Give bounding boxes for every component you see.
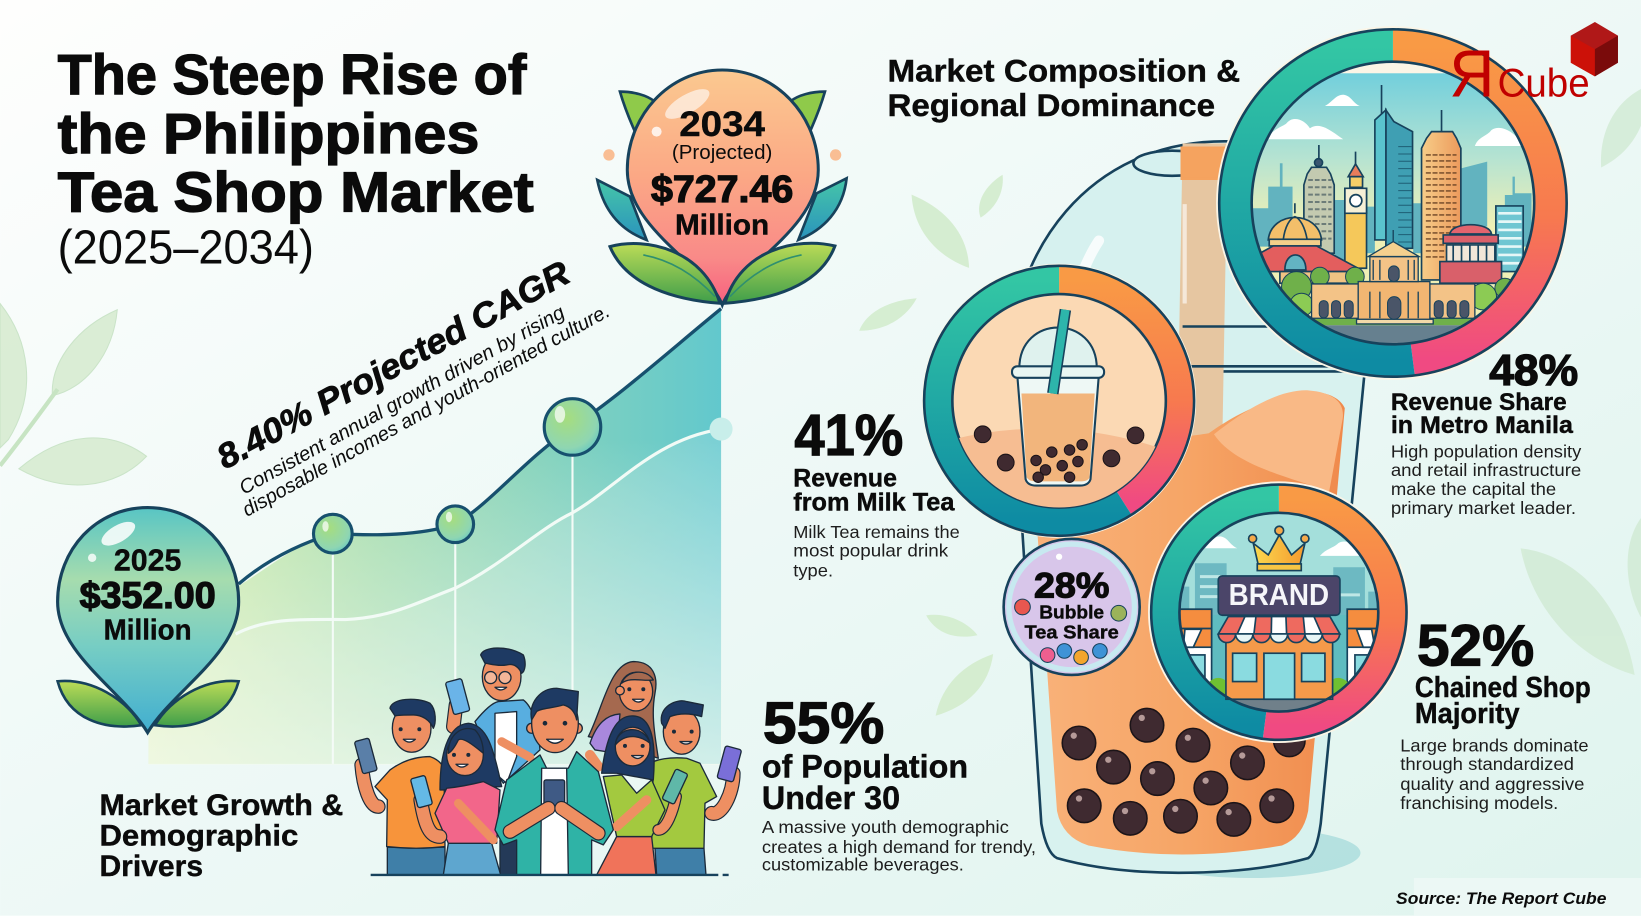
- chart nodes: [313, 399, 601, 553]
- city scene: [1243, 73, 1543, 353]
- 2025 bubble: [58, 508, 239, 733]
- heading: market composition: Regional Dominance: [887, 88, 1215, 123]
- title: [58, 43, 534, 275]
- stat: 48% metro manila: make the capital the: [1391, 479, 1556, 499]
- title: Tea Shop Market: [58, 160, 534, 223]
- stat: 55% population: 55%: [763, 691, 884, 756]
- stat: 52% chained shops: franchising models.: [1400, 793, 1558, 813]
- heading: market composition: Market Composition &: [887, 54, 1240, 89]
- tapioca pearls: [1062, 708, 1305, 836]
- stat: 48% metro manila: in Metro Manila: [1391, 412, 1574, 439]
- 2034 bubble: [597, 70, 847, 305]
- heading: market growth: Demographic: [99, 820, 298, 853]
- bubble: 28% bubble tea share: [1004, 539, 1140, 675]
- 2034 bubble: Million: [675, 208, 769, 240]
- stat: 55% population: [762, 691, 1036, 875]
- logo: RCube: [1449, 22, 1618, 111]
- source note: [1396, 878, 1641, 916]
- ring: metro manila skyline: [1216, 26, 1570, 380]
- bubble: 28% bubble tea share: Bubble: [1039, 601, 1104, 622]
- stat: 52% chained shops: Large brands dominate: [1400, 735, 1589, 755]
- stat: 41% milk tea: [793, 403, 960, 581]
- title: The Steep Rise of: [58, 43, 527, 106]
- stat: 52% chained shops: through standardized: [1400, 754, 1574, 774]
- stat: 41% milk tea: most popular drink: [793, 541, 948, 561]
- stat: 48% metro manila: High population density: [1391, 441, 1581, 461]
- 2034 bubble: 2034: [679, 104, 765, 144]
- 2025 bubble: 2025: [114, 544, 181, 577]
- stat: 48% metro manila: primary market leader.: [1391, 498, 1576, 518]
- source note: Source: The Report Cube: [1396, 889, 1606, 908]
- decorative tea leaves: left: [0, 303, 147, 485]
- illustration: youth group with phones: [354, 648, 742, 875]
- title: the Philippines: [58, 102, 479, 165]
- person: orange shirt man: [354, 699, 445, 875]
- stat: 41% milk tea: Revenue: [793, 465, 897, 493]
- stat: 52% chained shops: Chained Shop: [1415, 671, 1591, 703]
- stat: 48% metro manila: and retail infrastructure: [1391, 460, 1581, 480]
- 2025 bubble: Million: [104, 613, 192, 645]
- shop storefront: [1218, 526, 1340, 699]
- ring: chained shop brand: [1148, 481, 1410, 743]
- 2025 bubble: $352.00: [80, 575, 216, 616]
- heading: market composition: [887, 54, 1240, 123]
- stat: 52% chained shops: Majority: [1415, 697, 1520, 729]
- heading: market growth: [99, 789, 343, 883]
- person: coral pants girl: [597, 716, 688, 875]
- shop scene: [1180, 514, 1377, 710]
- milk tea cup icon: [959, 308, 1156, 508]
- person: centre man in teal jacket: [495, 688, 613, 875]
- stat: 55% population: customizable beverages.: [762, 855, 964, 875]
- person: woman at back right: [588, 662, 658, 767]
- CAGR callout: Consistent annual growth driven by rising: [236, 302, 568, 499]
- stat: 48% metro manila: 48%: [1489, 346, 1578, 395]
- heading: market growth: Drivers: [99, 850, 203, 883]
- stat: 52% chained shops: 52%: [1417, 614, 1534, 679]
- stat: 55% population: of Population: [762, 749, 968, 785]
- stat: 48% metro manila: [1391, 346, 1581, 518]
- decorative tea leaves: middle: [859, 175, 1003, 716]
- person: glasses man at back: [445, 648, 540, 783]
- decorative tea leaves: right: [1521, 89, 1641, 675]
- bubble: 28% bubble tea share: 28%: [1034, 566, 1109, 606]
- logo: RCube: Я: [1449, 36, 1494, 111]
- heading: market growth: Market Growth &: [99, 789, 343, 822]
- title: (2025–2034): [58, 221, 314, 275]
- CAGR callout: 8.40% Projected CAGR: [211, 254, 576, 477]
- logo: RCube: Cube: [1498, 61, 1590, 105]
- chart: market growth line area: [149, 309, 733, 765]
- 2034 bubble: $727.46: [651, 168, 793, 210]
- stat: 55% population: creates a high demand for trendy,: [762, 837, 1036, 857]
- stat: 55% population: A massive youth demographic: [762, 817, 1009, 837]
- giant bubble tea cup: [1009, 141, 1392, 878]
- stat: 41% milk tea: type.: [793, 561, 833, 581]
- person: pink shirt girl: [410, 723, 518, 875]
- ring: milk tea: [922, 264, 1196, 538]
- stat: 41% milk tea: 41%: [794, 403, 903, 468]
- stat: 52% chained shops: [1400, 614, 1591, 813]
- 2034 bubble: (Projected): [672, 142, 772, 164]
- bubble: 28% bubble tea share: Tea Share: [1025, 621, 1119, 642]
- stat: 52% chained shops: quality and aggressive: [1400, 774, 1585, 794]
- stat: 41% milk tea: Milk Tea remains the: [793, 522, 960, 542]
- ring: chained shop brand: BRAND: [1229, 579, 1329, 612]
- stat: 55% population: Under 30: [762, 780, 900, 816]
- person: right green shirt man: [652, 701, 742, 875]
- CAGR callout: disposable incomes and youth-oriented culture.: [239, 300, 614, 521]
- stat: 48% metro manila: Revenue Share: [1391, 389, 1567, 416]
- stat: 41% milk tea: from Milk Tea: [793, 489, 955, 517]
